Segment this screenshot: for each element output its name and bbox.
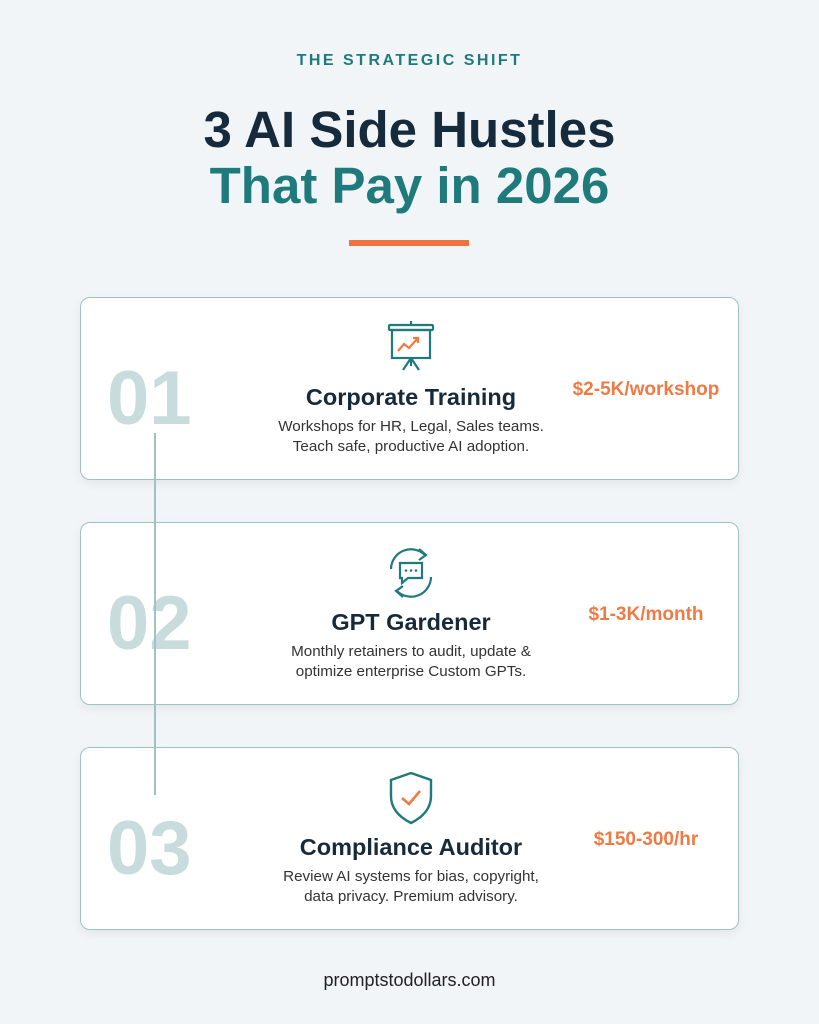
card 2: Monthly retainers to audit, update & (291, 643, 531, 660)
title (204, 101, 615, 214)
card 1: Teach safe, productive AI adoption. (293, 438, 529, 455)
title: That Pay in 2026 (210, 157, 609, 214)
card 3: data privacy. Premium advisory. (304, 888, 518, 905)
connector line (154, 433, 156, 795)
card 3: Review AI systems for bias, copyright, (283, 868, 539, 885)
card 1: Workshops for HR, Legal, Sales teams. (278, 418, 544, 435)
card 3: $150-300/hr (594, 829, 698, 850)
icon: refresh chat (390, 548, 432, 598)
card 1: Corporate Training (306, 384, 516, 410)
card 2: optimize enterprise Custom GPTs. (296, 663, 526, 680)
card 1: $2-5K/workshop (573, 379, 719, 400)
card 2: $1-3K/month (588, 604, 704, 625)
card 3: Compliance Auditor (300, 834, 522, 860)
card 2: GPT Gardener (331, 609, 491, 635)
accent bar (349, 240, 469, 246)
card 3 (80, 747, 739, 930)
card 1 (80, 297, 739, 480)
card 1: 01 (107, 356, 192, 441)
card 2 (80, 522, 739, 705)
kicker: THE STRATEGIC SHIFT (297, 52, 522, 69)
title: 3 AI Side Hustles (204, 101, 615, 158)
icon: presentation board (388, 321, 434, 371)
card 2: 02 (107, 581, 192, 666)
footer: promptstodollars.com (323, 970, 496, 990)
card 3: 03 (107, 806, 192, 891)
icon: shield check (390, 772, 432, 824)
